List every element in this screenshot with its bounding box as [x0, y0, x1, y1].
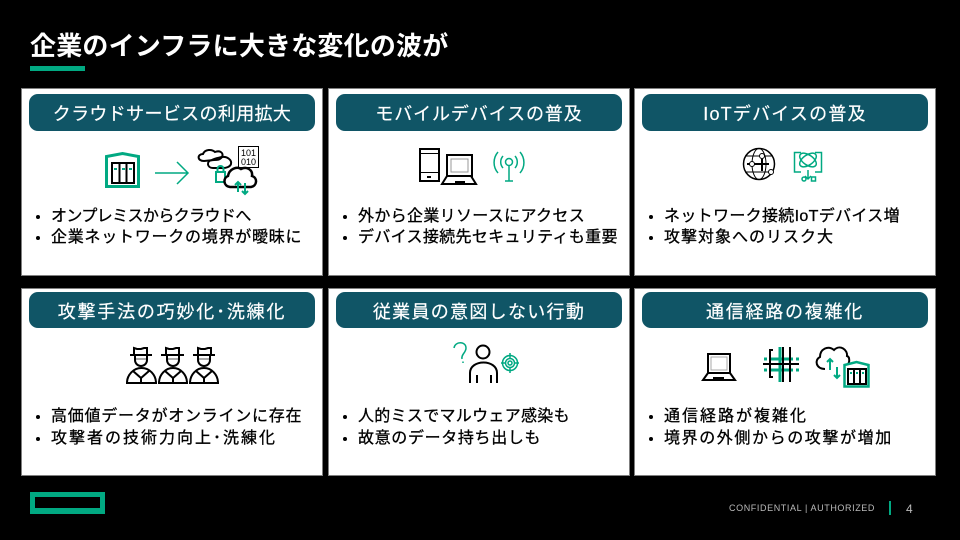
heading: mobile: [336, 94, 622, 131]
bullets: IoT: [649, 207, 900, 246]
heading: routes: [642, 292, 928, 328]
bullets: cloud: [36, 207, 302, 246]
heading: IoT: IoTデバイスの普及: [703, 104, 867, 124]
bullets: routes: 通信経路が複雑化: [664, 408, 808, 425]
bullets: employees: 人的ミスでマルウェア感染も: [358, 408, 570, 425]
bullets: attacks: [36, 407, 302, 446]
bullets: mobile: [343, 207, 618, 246]
bullets: IoT: 攻撃対象へのリスク大: [664, 229, 834, 246]
heading: attacks: 攻撃手法の巧妙化･洗練化: [58, 302, 286, 322]
bullets: mobile: 外から企業リソースにアクセス: [358, 208, 585, 225]
heading: employees: [336, 292, 622, 328]
heading: IoT: [642, 94, 928, 131]
icons: phone, laptop, antenna: [419, 148, 525, 185]
logo: green rectangle: [30, 492, 105, 514]
attacker 1: [127, 348, 156, 383]
bullets: employees: [343, 407, 570, 446]
icons: on-prem to cloud: [105, 146, 259, 196]
icon: person, question mark, target: [453, 342, 519, 383]
panel: employees: [328, 288, 630, 476]
icons: globe and IoT: [742, 148, 822, 182]
attacker 2: [159, 348, 187, 383]
heading: attacks: [29, 292, 315, 328]
title accent bar: [30, 66, 85, 71]
heading: routes: 通信経路の複雑化: [706, 302, 864, 322]
bullets: attacks: 攻撃者の技術力向上･洗練化: [51, 430, 277, 446]
panel: IoT: [634, 88, 936, 276]
icons: on-prem to cloud: 101: [241, 148, 256, 158]
panel: cloud: [21, 88, 323, 276]
heading: mobile: モバイルデバイスの普及: [375, 104, 583, 124]
heading: cloud: [29, 94, 315, 131]
icons: laptop, mesh, cloud and datacenter: [701, 346, 870, 388]
bullets: IoT: ネットワーク接続IoTデバイス増: [664, 208, 900, 225]
panel: mobile: [328, 88, 630, 276]
bullets: employees: 故意のデータ持ち出しも: [358, 430, 541, 446]
bullets: routes: 境界の外側からの攻撃が増加: [664, 430, 893, 446]
heading: cloud: クラウドサービスの利用拡大: [53, 104, 291, 124]
bullets: mobile: デバイス接続先セキュリティも重要: [358, 229, 618, 246]
panel: attacks: [21, 288, 323, 476]
icons: on-prem to cloud: 010: [241, 157, 256, 167]
panel: routes: [634, 288, 936, 476]
attacker 3: [190, 348, 218, 383]
bullets: cloud: 企業ネットワークの境界が曖昧に: [51, 229, 302, 246]
bullets: attacks: 高価値データがオンラインに存在: [51, 408, 302, 425]
icon: three attackers: [126, 346, 219, 384]
heading: employees: 従業員の意図しない行動: [373, 302, 585, 322]
title: 企業のインフラに大きな変化の波が: [30, 31, 448, 61]
footer: page number: 4: [906, 502, 913, 516]
footer: divider: [889, 501, 891, 515]
footer: confidential: CONFIDENTIAL | AUTHORIZED: [729, 503, 875, 513]
bullets: cloud: オンプレミスからクラウドへ: [51, 208, 251, 225]
bullets: routes: [649, 407, 893, 446]
